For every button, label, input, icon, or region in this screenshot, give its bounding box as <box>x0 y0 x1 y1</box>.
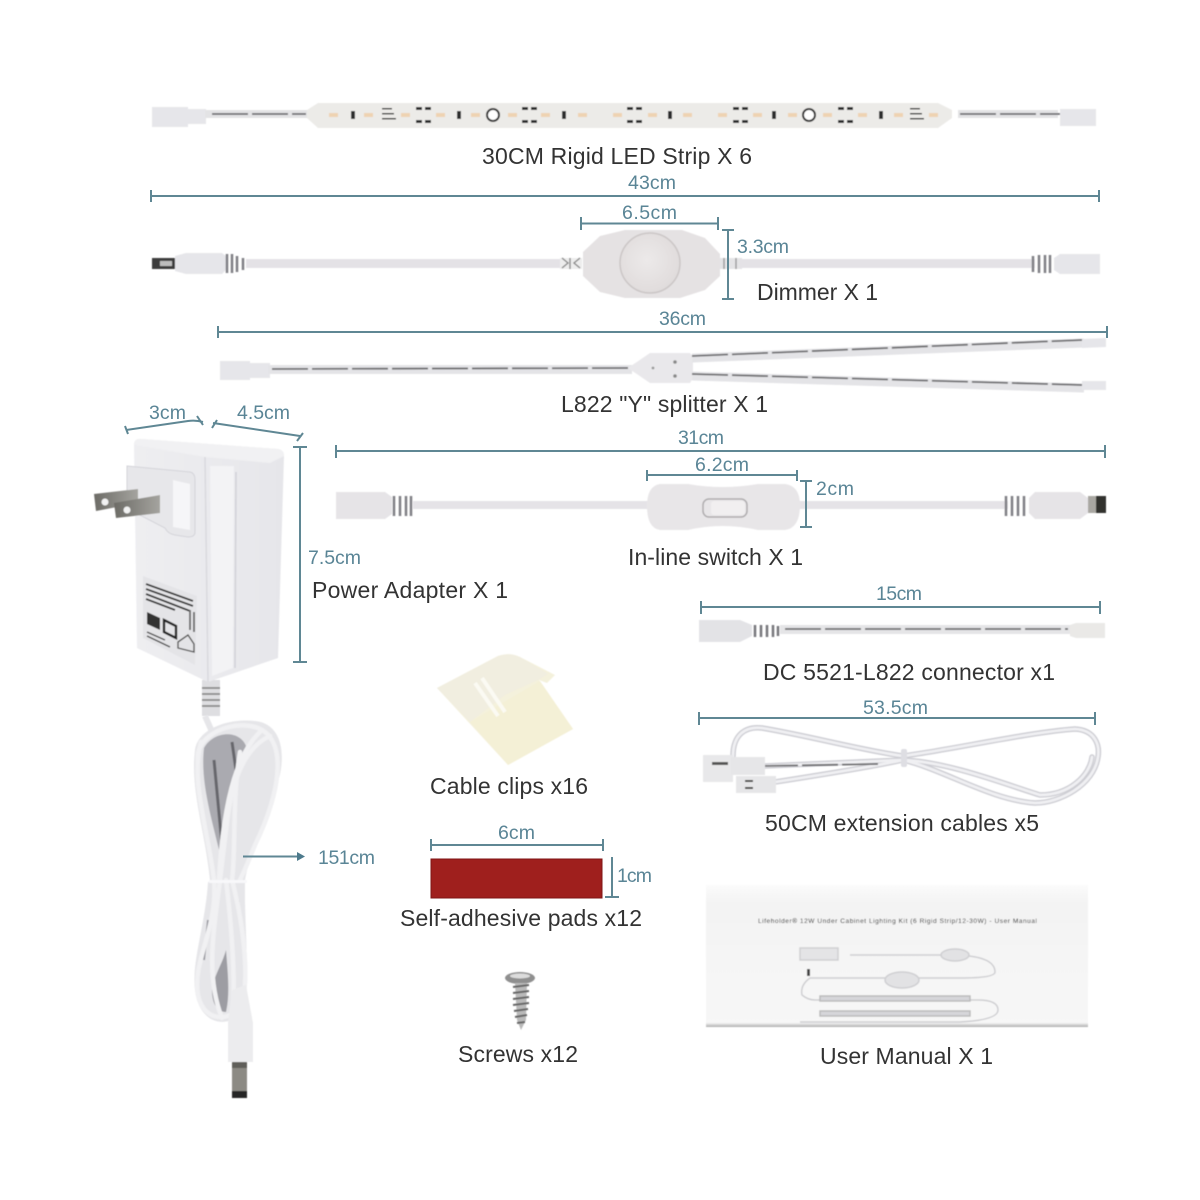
dimension: 3.3cm <box>722 230 789 299</box>
caption: power adapter: Power Adapter X 1 <box>312 577 508 603</box>
caption: dimmer: Dimmer X 1 <box>757 279 878 305</box>
Y splitter <box>220 338 1106 390</box>
cable clip <box>437 654 573 765</box>
caption: DC connector: DC 5521-L822 connector x1 <box>763 659 1055 685</box>
manual diagram <box>800 948 998 1022</box>
caption: in-line switch: In-line switch X 1 <box>628 544 803 570</box>
caption: LED strip: 30CM Rigid LED Strip X 6 <box>482 143 752 169</box>
dimension: 1cm <box>605 857 652 897</box>
screw <box>505 972 535 1030</box>
dimension: 6.2cm: 6.2cm <box>695 454 749 476</box>
dimension: 53.5cm: 53.5cm <box>863 697 928 719</box>
caption: Y splitter: L822 "Y" splitter X 1 <box>561 391 768 417</box>
dimmer body <box>583 230 720 298</box>
dimension: 6.5cm: 6.5cm <box>622 202 677 224</box>
in-line switch cable <box>336 484 1106 530</box>
caption: user manual: User Manual X 1 <box>820 1043 993 1069</box>
extension cables <box>703 728 1098 803</box>
user manual <box>706 885 1088 1027</box>
dimension: 3.3cm: 3.3cm <box>737 236 789 258</box>
dimension: 151cm arrow <box>243 847 375 869</box>
self-adhesive pad <box>431 859 602 898</box>
dimension: 43cm: 43cm <box>628 172 676 194</box>
dimension: 2cm <box>800 478 854 527</box>
dimension: 1cm: 1cm <box>617 865 652 887</box>
prongs <box>94 489 138 511</box>
dimension: 3cm <box>125 402 203 434</box>
power adapter <box>94 439 284 716</box>
dimension: 15cm: 15cm <box>876 583 922 605</box>
dimension: 6cm: 6cm <box>498 822 535 844</box>
caption: extension cables: 50CM extension cables x5 <box>765 810 1039 836</box>
caption: adhesive pads: Self-adhesive pads x12 <box>400 905 642 931</box>
dimension: 6.5cm <box>581 202 718 230</box>
dimension: 31cm: 31cm <box>678 427 724 449</box>
dimension: 3cm: 3cm <box>149 402 186 424</box>
dimmer cable <box>152 230 1100 298</box>
switch body <box>647 484 800 530</box>
DC 5521-L822 connector <box>699 620 1105 642</box>
dimension: 7.5cm: 7.5cm <box>308 547 361 569</box>
DC plug <box>228 985 253 1062</box>
LED strip <box>152 103 1096 128</box>
dimension: 2cm: 2cm <box>816 478 854 500</box>
dimension: 4.5cm <box>212 402 303 441</box>
dimension: 4.5cm: 4.5cm <box>237 402 290 424</box>
coil shadows <box>203 734 246 862</box>
dimension: 151cm arrow: 151cm <box>318 847 375 869</box>
plug plate <box>127 466 195 537</box>
user manual: Lifeholder® 12W Under Cabinet Lighting Kit (6 Rigid Strip/12-30W) - User Manual <box>758 917 1038 925</box>
dimension: 36cm: 36cm <box>659 308 706 330</box>
power cable coil <box>194 716 282 1098</box>
caption: cable clips: Cable clips x16 <box>430 773 588 799</box>
rating label <box>143 576 197 665</box>
caption: screws: Screws x12 <box>458 1041 578 1067</box>
